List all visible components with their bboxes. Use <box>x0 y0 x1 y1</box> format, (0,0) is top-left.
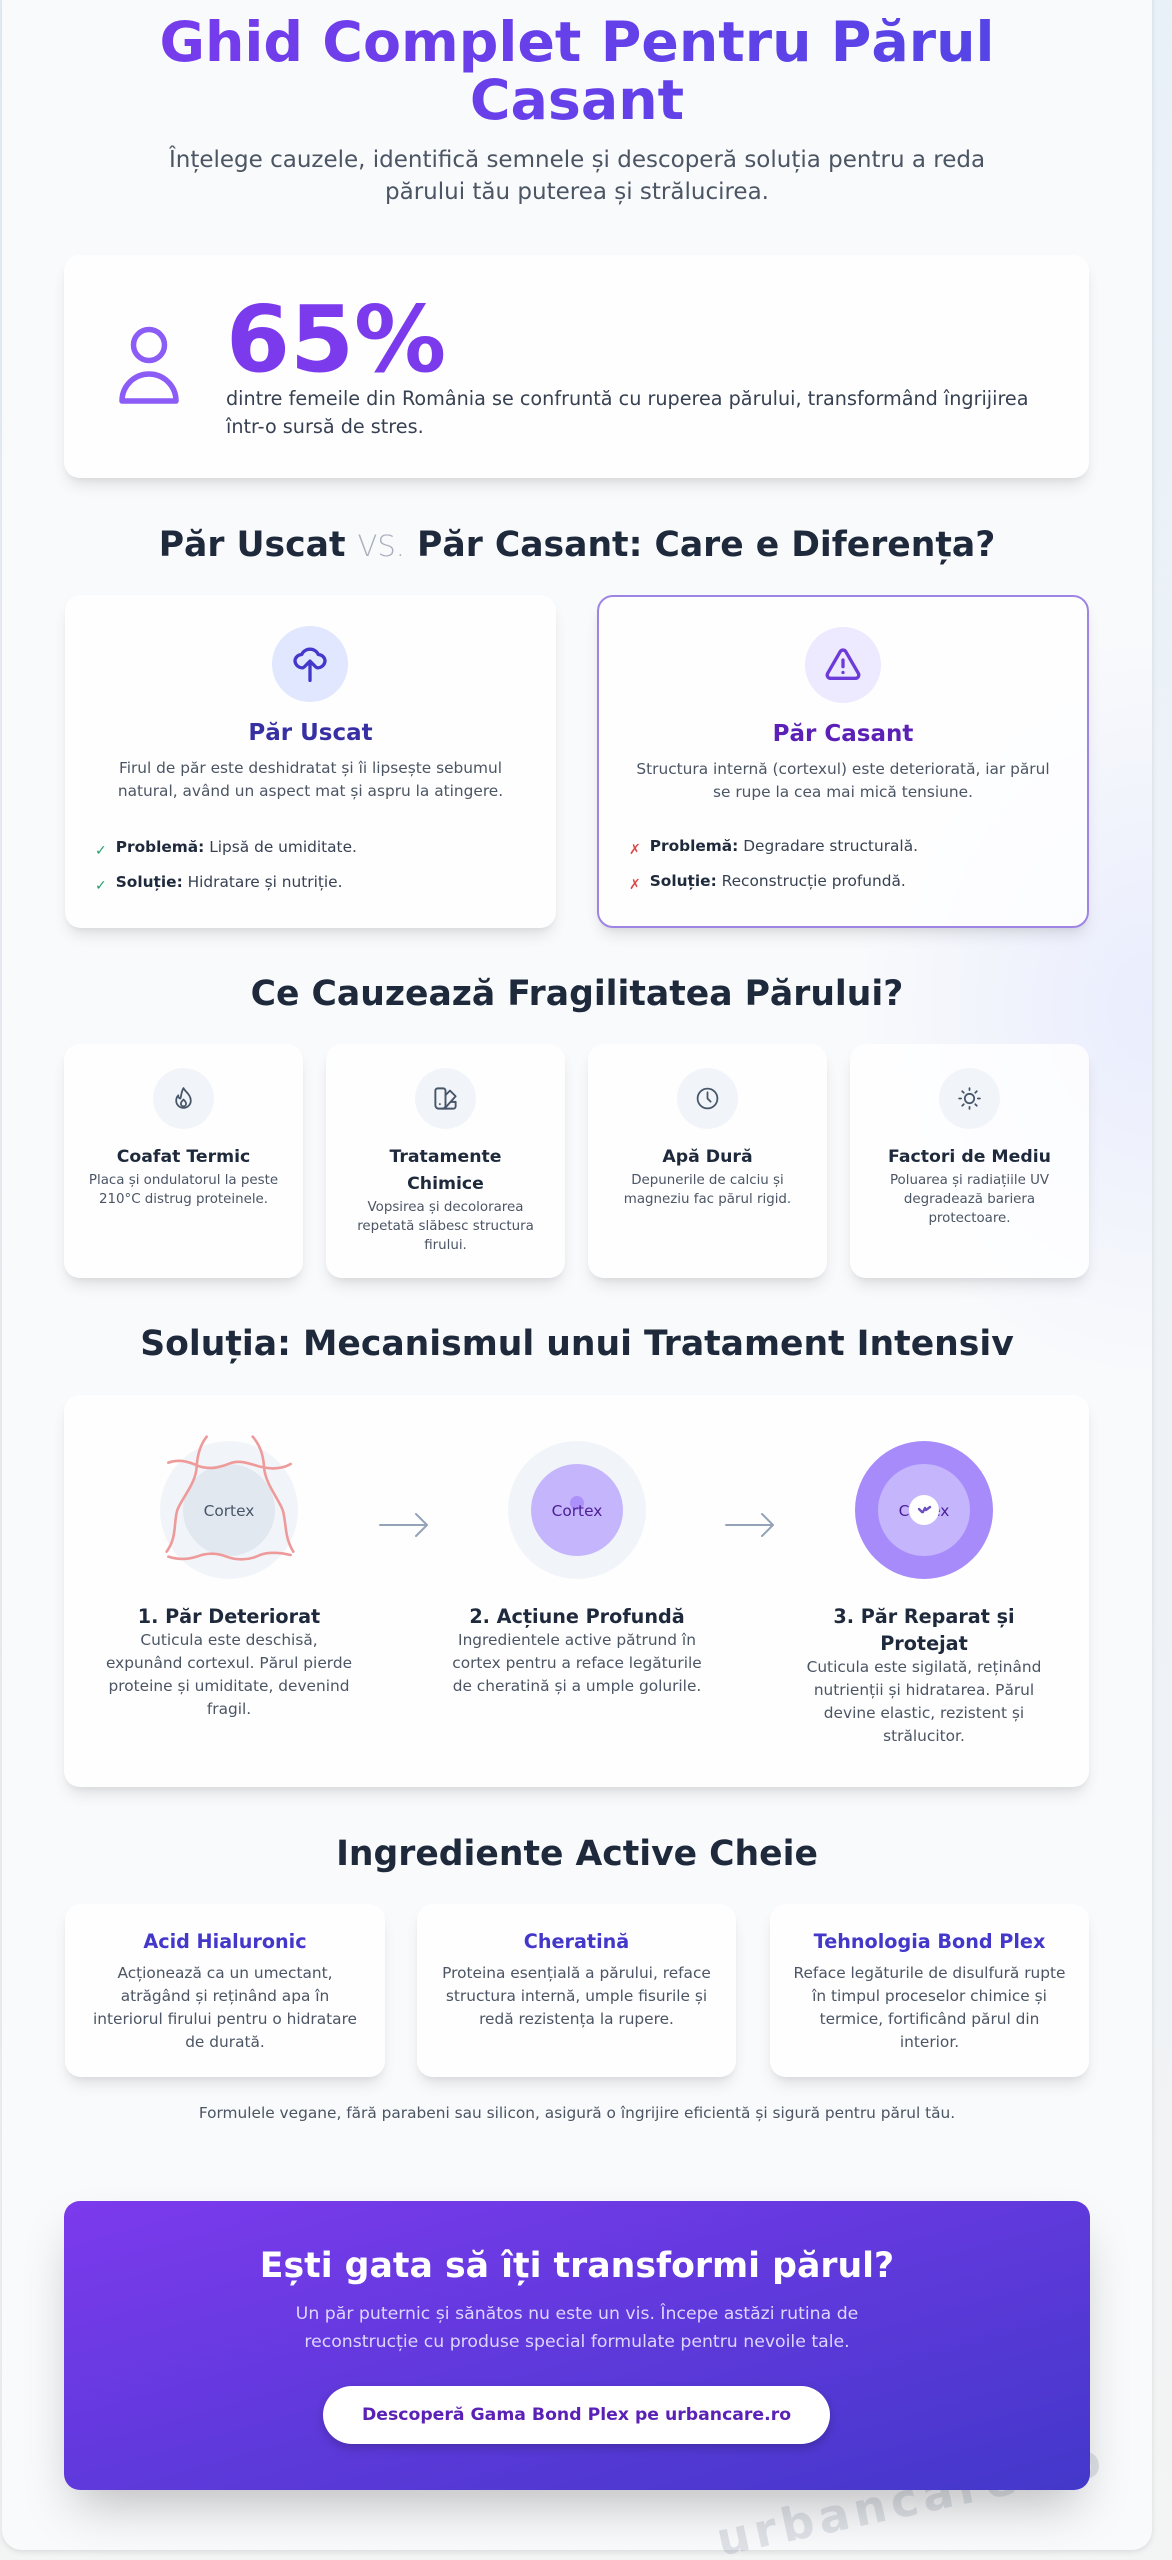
icon: sun <box>939 1068 1000 1129</box>
heading: ingredients: Ingrediente Active Cheie <box>336 1834 818 1874</box>
step text <box>106 1631 352 1718</box>
diagram: repaired hair <box>855 1441 993 1579</box>
text <box>357 1200 534 1253</box>
heading: vs: Păr Uscat VS. Păr Casant: Care e Diferența? <box>159 525 995 565</box>
step text: strălucitor. <box>883 1727 965 1745</box>
title: Chimice <box>407 1174 484 1194</box>
cortex label: Cortex <box>204 1502 254 1520</box>
item: ✓ Problemă: Lipsă de umiditate. <box>95 838 357 859</box>
text <box>624 1173 791 1207</box>
panel: bond plex <box>770 1904 1089 2077</box>
text: de durată. <box>185 2033 265 2051</box>
text: structura internă, umple fisurile și <box>446 1987 707 2005</box>
heading: causes: Ce Cauzează Fragilitatea Părului? <box>251 974 903 1014</box>
stat text <box>226 387 1028 438</box>
card text: Structura internă (cortexul) este deteriorată, iar părul <box>636 760 1050 778</box>
cta button <box>323 2386 830 2444</box>
step 2 <box>452 1441 702 1695</box>
step text <box>452 1631 702 1695</box>
text: interiorul firului pentru o hidratare <box>93 2010 357 2028</box>
item: ✗ Soluție: Reconstrucție profundă. <box>629 872 906 893</box>
panel: factori de mediu <box>850 1044 1089 1278</box>
cortex label: Cortex <box>552 1502 602 1520</box>
text: Placa și ondulatorul la peste <box>89 1173 278 1188</box>
text <box>442 1964 711 2028</box>
text: degradează bariera <box>904 1192 1035 1207</box>
panel: tratamente chimice <box>326 1044 565 1278</box>
text: termice, fortificând părul din <box>820 2010 1039 2028</box>
subtitle <box>169 146 985 205</box>
stat number: 65% <box>226 286 446 393</box>
text: în timpul proceselor chimice și <box>812 1987 1047 2005</box>
card text: Firul de păr este deshidratat și îi lipsește sebumul <box>119 759 502 777</box>
title: Tratamente <box>389 1147 502 1167</box>
text: magneziu fac părul rigid. <box>624 1192 791 1207</box>
step 3 <box>807 1441 1041 1745</box>
title <box>0 14 1154 130</box>
step text: nutrienții și hidratarea. Părul <box>814 1681 1034 1699</box>
icon: clock <box>677 1068 738 1129</box>
step title: 1. Păr Deteriorat <box>138 1605 320 1628</box>
title: Coafat Termic <box>117 1147 250 1167</box>
subtitle: părului tău puterea și strălucirea. <box>385 179 769 205</box>
step text: cortex pentru a reface legăturile <box>452 1654 702 1672</box>
step text: Cuticula este sigilată, reținând <box>807 1658 1041 1676</box>
panel: cheratina <box>417 1904 736 2077</box>
subtitle: Înțelege cauzele, identifică semnele și descoperă soluția pentru a reda <box>169 147 985 173</box>
text: atrăgând și reținând apa în <box>121 1987 329 2005</box>
text: Depunerile de calciu și <box>631 1173 784 1188</box>
item: ✓ Soluție: Hidratare și nutriție. <box>95 873 342 894</box>
text: Vopsirea și decolorarea <box>368 1200 523 1215</box>
icon: swatch <box>415 1068 476 1129</box>
note: Formulele vegane, fără parabeni sau silicon, asigură o îngrijire eficientă și sigură pentru părul tău. <box>199 2104 955 2122</box>
button label: Descoperă Gama Bond Plex pe urbancare.ro <box>362 2405 791 2425</box>
text: repetată slăbesc structura <box>357 1219 534 1234</box>
arrow 2 <box>725 1513 774 1537</box>
stat text: dintre femeile din România se confruntă cu ruperea părului, transformând îngrijirea <box>226 387 1028 410</box>
step text: Cuticula este deschisă, <box>140 1631 318 1649</box>
text: Reface legăturile de disulfură rupte <box>794 1964 1065 1982</box>
diagram: deep action <box>508 1441 646 1579</box>
panel: apa dura <box>588 1044 827 1278</box>
card text: se rupe la cea mai mică tensiune. <box>713 783 973 801</box>
item: ✗ Problemă: Degradare structurală. <box>629 837 918 858</box>
title: Acid Hialuronic <box>143 1930 307 1953</box>
step text: fragil. <box>207 1700 251 1718</box>
panel: statistic <box>64 255 1089 478</box>
icon: warning <box>805 627 881 703</box>
panel: par uscat <box>65 595 556 928</box>
title: Cheratină <box>524 1930 629 1953</box>
text <box>890 1173 1049 1226</box>
step text: Ingredientele active pătrund în <box>458 1631 696 1649</box>
title: Casant <box>470 69 684 133</box>
cuticle lines <box>165 1435 295 1561</box>
cta title: Ești gata să îți transformi părul? <box>260 2246 894 2286</box>
panel: call to action <box>64 2201 1090 2490</box>
card title: Păr Uscat <box>248 720 373 746</box>
panel: mechanism <box>64 1395 1089 1787</box>
stat text: într-o sursă de stres. <box>226 415 424 438</box>
diagram: damaged hair <box>160 1441 298 1579</box>
arrow 1 <box>379 1513 428 1537</box>
icon: cloud upload <box>272 626 348 702</box>
title: Factori de Mediu <box>888 1147 1051 1167</box>
step title: 2. Acțiune Profundă <box>469 1605 685 1628</box>
text: 210°C distrug proteinele. <box>99 1192 268 1207</box>
card text: natural, având un aspect mat și aspru la atingere. <box>118 782 503 800</box>
step text: proteine și umiditate, devenind <box>109 1677 349 1695</box>
text: redă rezistența la rupere. <box>479 2010 674 2028</box>
title: Ghid Complet Pentru Părul <box>159 11 995 75</box>
heading: solution: Soluția: Mecanismul unui Tratament Intensiv <box>140 1324 1014 1364</box>
list <box>95 838 357 894</box>
icon: person <box>119 326 179 404</box>
text: protectoare. <box>928 1211 1011 1226</box>
cta text <box>296 2303 858 2352</box>
title: Apă Dură <box>662 1147 753 1167</box>
step text: expunând cortexul. Părul pierde <box>106 1654 352 1672</box>
step title <box>833 1605 1015 1655</box>
card text <box>118 759 503 800</box>
step 1 <box>106 1435 352 1718</box>
text: Poluarea și radiațiile UV <box>890 1173 1049 1188</box>
panel: par casant <box>597 595 1089 928</box>
cta text: Un păr puternic și sănătos nu este un vis. Începe astăzi rutina de <box>296 2304 858 2324</box>
text <box>89 1173 278 1207</box>
cta text: reconstrucție cu produse special formulate pentru nevoile tale. <box>304 2332 850 2352</box>
step title: Protejat <box>880 1632 968 1655</box>
step text <box>807 1658 1041 1745</box>
panel: acid hialuronic <box>65 1904 385 2077</box>
text: interior. <box>900 2033 959 2051</box>
step text: devine elastic, rezistent și <box>824 1704 1024 1722</box>
title <box>389 1147 502 1194</box>
text: Proteina esențială a părului, reface <box>442 1964 711 1982</box>
step text: de cheratină și a umple golurile. <box>453 1677 701 1695</box>
list <box>629 837 918 893</box>
text: Acționează ca un umectant, <box>117 1964 333 1982</box>
icon: flame <box>153 1068 214 1129</box>
card text <box>636 760 1050 801</box>
text: firului. <box>424 1238 467 1253</box>
text <box>794 1964 1065 2051</box>
title: Tehnologia Bond Plex <box>814 1930 1045 1953</box>
cortex label: Cortex <box>899 1502 949 1520</box>
text <box>93 1964 357 2051</box>
panel: coafat termic <box>64 1044 303 1278</box>
card title: Păr Casant <box>773 721 913 747</box>
check mark <box>918 1506 932 1514</box>
step title: 3. Păr Reparat și <box>833 1605 1015 1628</box>
